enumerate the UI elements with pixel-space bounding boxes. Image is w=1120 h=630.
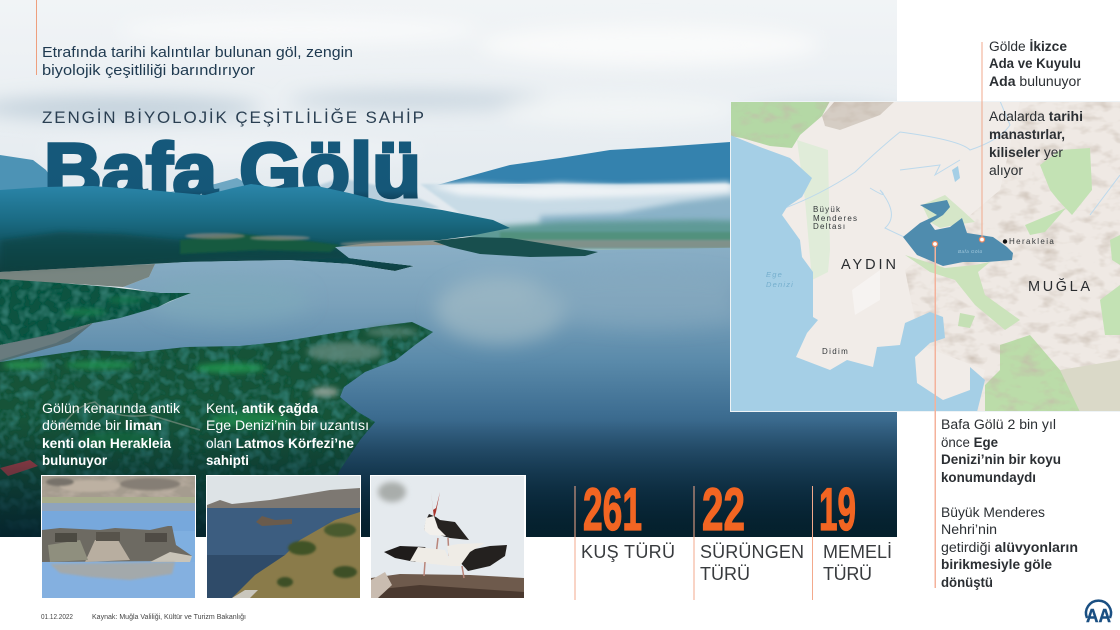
footer: date and source: Kaynak: Muğla Valiliği, Kültür ve Turizm Bakanlığı	[92, 614, 246, 621]
photo: island and lake shore	[206, 475, 361, 599]
text: monasteries	[989, 109, 1083, 178]
intro text: biyolojik çeşitliliği barındırıyor	[42, 63, 255, 79]
map labels: Büyük	[813, 205, 841, 214]
stat: 22 reptile species: TÜRÜ	[700, 564, 750, 584]
map labels: Didim	[822, 347, 849, 356]
text: alluvium: getirdiği alüvyonların	[941, 540, 1078, 555]
map labels: AYDIN	[841, 257, 896, 273]
map labels: Ege	[766, 270, 783, 279]
text: Latmos Körfezi: olan Latmos Körfezi’ne	[206, 436, 354, 451]
map labels	[766, 205, 1090, 356]
text: Herakleia: Gölün kenarında antik	[42, 401, 180, 416]
stat: 22 reptile species	[694, 476, 804, 600]
text: Latmos Körfezi: sahipti	[206, 453, 249, 468]
text: monasteries: Adalarda tarihi	[989, 109, 1083, 124]
text: monasteries: manastırlar,	[989, 127, 1065, 142]
map labels: Menderes	[813, 214, 858, 223]
title behind the ridge: Bafa Gölü	[44, 128, 421, 214]
text: history of the lake: önce Ege	[941, 435, 998, 450]
stork standing	[431, 492, 440, 518]
lake water	[0, 245, 897, 537]
background photo: Bafa lake aerial view	[0, 0, 920, 537]
stat: 261 bird species	[574, 476, 675, 600]
stat: 261 bird species: KUŞ TÜRÜ	[581, 542, 675, 562]
intro text	[42, 45, 353, 79]
mudflat and west shore land	[0, 264, 155, 287]
text: monasteries: alıyor	[989, 163, 1024, 178]
text: Latmos Körfezi: Ege Denizi’nin bir uzantısı	[206, 418, 369, 433]
decorative accent line: top left	[36, 0, 37, 75]
text: alluvium	[941, 505, 1078, 590]
text: islands: Ada ve Kuyulu	[989, 56, 1081, 71]
text: history of the lake	[941, 417, 1061, 485]
text: history of the lake: Denizi’nin bir koyu	[941, 452, 1061, 467]
map labels: Herakleia	[1009, 237, 1055, 246]
footer: date and source: 01.12.2022	[41, 614, 73, 621]
text: Herakleia: bulunuyor	[42, 453, 108, 468]
stat: 19 mammal species	[812, 476, 892, 600]
bottom darkening	[0, 432, 897, 537]
stat: 19 mammal species: MEMELİ	[823, 542, 892, 562]
map labels: Denizi	[766, 280, 794, 289]
text: Herakleia: dönemde bir liman	[42, 418, 162, 433]
stat: 22 reptile species: 22	[702, 476, 745, 543]
sea	[730, 135, 985, 412]
photo: white storks on a nest	[370, 475, 526, 599]
logo: AA: AA	[1086, 606, 1111, 626]
stork left	[384, 546, 426, 562]
text: Latmos Körfezi	[206, 401, 369, 468]
text: history of the lake: konumundaydı	[941, 470, 1036, 485]
intro text: Etrafında tarihi kalıntılar bulunan göl, zengin	[42, 45, 353, 61]
text: alluvium: Büyük Menderes	[941, 505, 1045, 520]
text: islands: Gölde İkizce	[989, 39, 1067, 54]
map labels: Bafa Gölü	[958, 249, 983, 254]
callout leader lines and dots	[932, 42, 984, 588]
stat: 22 reptile species: SÜRÜNGEN	[700, 542, 804, 562]
photo: Herakleia ruins in the lake	[41, 475, 196, 599]
text: history of the lake: Bafa Gölü 2 bin yıl	[941, 417, 1056, 432]
text: alluvium: Nehri’nin	[941, 522, 997, 537]
text: Herakleia: kenti olan Herakleia	[42, 436, 171, 451]
text: Latmos Körfezi: Kent, antik çağda	[206, 401, 318, 416]
stork right	[458, 545, 507, 571]
stat: 19 mammal species: TÜRÜ	[823, 564, 872, 584]
text: monasteries: kiliseler yer	[989, 145, 1064, 160]
text: islands	[989, 39, 1082, 89]
map labels: MUĞLA	[1028, 278, 1090, 295]
terrain and vegetation	[730, 101, 1120, 412]
Bafa lake	[903, 200, 1013, 266]
text: islands: Ada bulunuyor	[989, 74, 1082, 89]
stat: 261 bird species: 261	[583, 476, 642, 543]
panel: map of Bafa Lake region	[730, 101, 1120, 412]
south shore land	[0, 322, 433, 537]
map labels: Deltası	[813, 222, 846, 231]
far island	[433, 237, 598, 257]
stat: 19 mammal species: 19	[819, 476, 856, 543]
text: alluvium: dönüştü	[941, 575, 993, 590]
text: alluvium: birikmesiyle göle	[941, 557, 1052, 572]
main mountain ridge and north shore	[0, 184, 510, 272]
text: Herakleia	[42, 401, 180, 468]
subtitle: ZENGİN BİYOLOJİK ÇEŞİTLİLİĞE SAHİP	[42, 108, 424, 127]
